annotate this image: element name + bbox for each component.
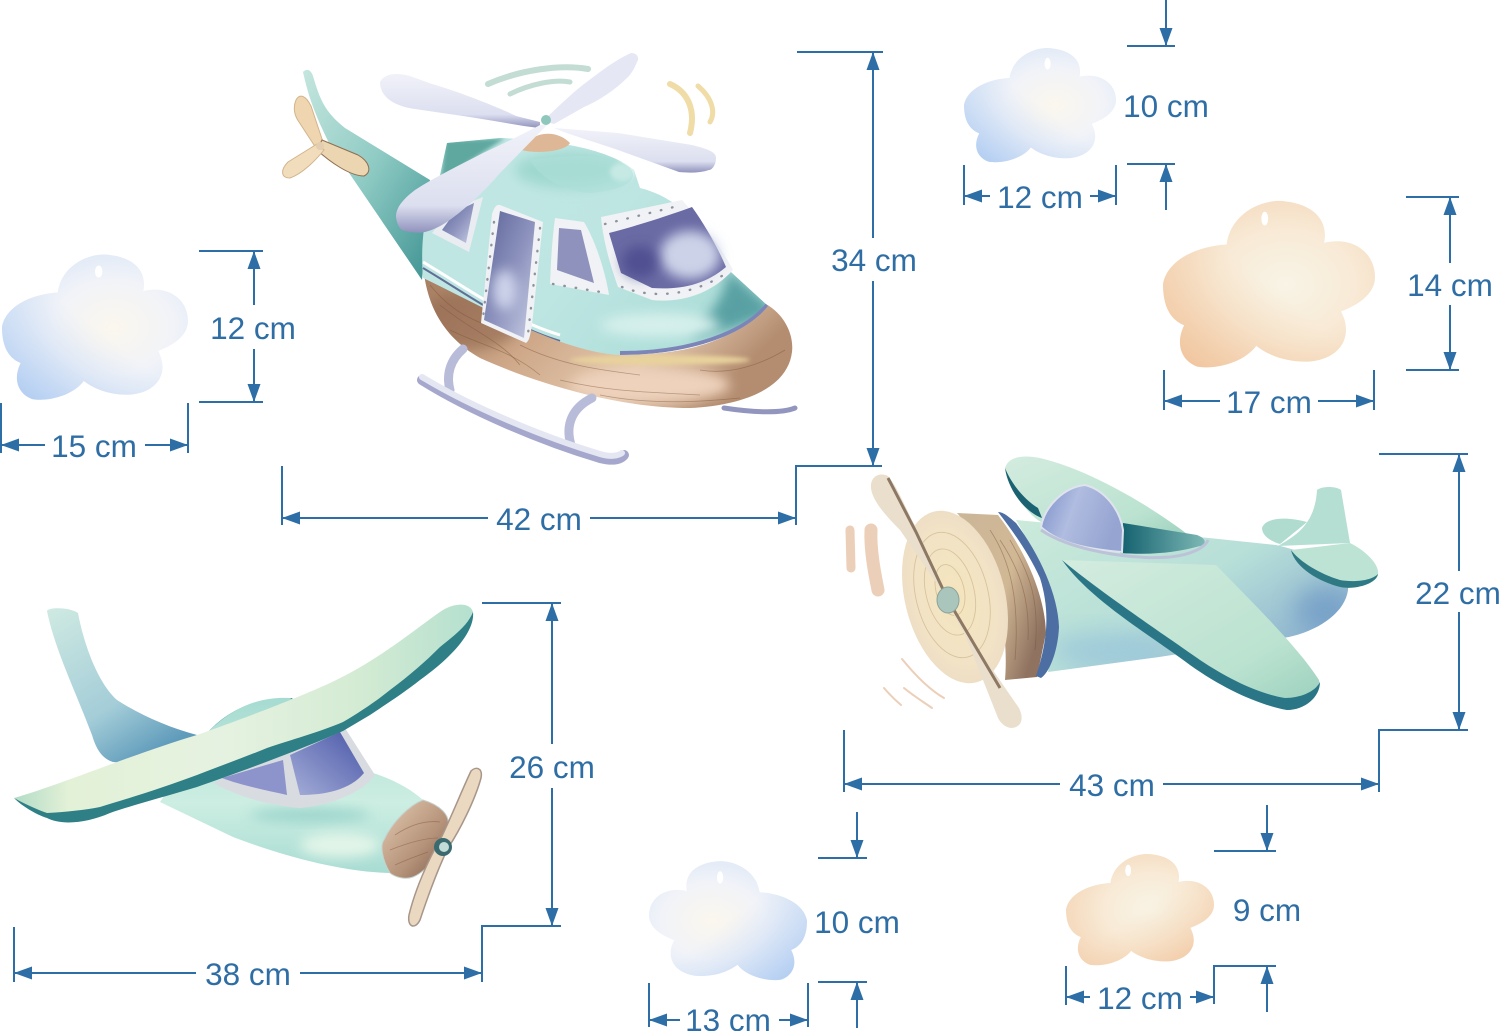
left plane canopy <box>213 728 375 808</box>
dimension: left plane width 38 cm: 38 cm <box>205 956 291 992</box>
tail rotor front blades <box>283 140 369 178</box>
right plane canopy <box>1041 485 1208 558</box>
helicopter side window <box>550 218 609 295</box>
dimension: small peach cloud height 9 cm <box>1214 805 1301 1012</box>
right plane tail <box>1262 487 1378 588</box>
left plane wing <box>14 605 473 822</box>
right plane fuselage <box>1016 520 1355 672</box>
right plane blue ring <box>998 512 1059 678</box>
illustration: blue cloud left <box>2 255 188 400</box>
dimension: left plane height 26 cm: 26 cm <box>509 749 595 785</box>
dimension: helicopter height 34 cm: 34 cm <box>831 242 917 278</box>
dimension: small peach cloud width 12 cm: 12 cm <box>1097 980 1183 1016</box>
helicopter skids <box>422 349 795 460</box>
right plane motion marks <box>850 530 944 708</box>
left plane propeller <box>409 768 481 926</box>
illustration: right propeller plane <box>850 456 1378 728</box>
left plane roof <box>208 698 300 740</box>
dimension: right plane width 43 cm <box>844 730 1468 803</box>
dimension: peach cloud height 14 cm: 14 cm <box>1407 267 1493 303</box>
dimension: peach cloud width 17 cm: 17 cm <box>1226 384 1312 420</box>
helicopter tail boom <box>303 70 430 280</box>
cabin roof dome outline <box>530 156 633 193</box>
dimension: left cloud width 15 cm: 15 cm <box>51 428 137 464</box>
top wing dark edge <box>1005 468 1042 518</box>
right plane top wing <box>1005 456 1195 540</box>
dimension: left plane width 38 cm <box>14 926 561 992</box>
right plane cockpit opening <box>1120 523 1205 554</box>
left plane tail fin <box>47 608 197 765</box>
helicopter main rotor blades <box>380 53 716 233</box>
dimension: bottom cloud height 10 cm: 10 cm <box>814 904 900 940</box>
right plane propeller <box>871 474 1022 728</box>
left plane fuselage <box>160 698 423 873</box>
right plane wooden spinner <box>885 500 1025 694</box>
helicopter cabin body <box>422 138 775 355</box>
illustration: helicopter <box>283 53 795 460</box>
helicopter rotor hub <box>522 134 570 152</box>
dimension: top cloud height 10 cm: 10 cm <box>1123 88 1209 124</box>
helicopter windshield <box>601 200 733 301</box>
helicopter back window <box>432 197 483 252</box>
illustration: peach cloud large <box>1163 201 1375 367</box>
helicopter motion lines <box>488 67 713 133</box>
dimension: top cloud width 12 cm: 12 cm <box>997 179 1083 215</box>
illustration: blue cloud bottom <box>649 861 807 980</box>
dimension: helicopter width 42 cm: 42 cm <box>496 501 582 537</box>
dimension: right plane width 43 cm: 43 cm <box>1069 767 1155 803</box>
dimension: left cloud height 12 cm: 12 cm <box>210 310 296 346</box>
helicopter door <box>481 205 543 343</box>
left plane wood cowl <box>382 800 448 878</box>
dimension: small peach cloud height 9 cm: 9 cm <box>1233 892 1301 928</box>
helicopter wood belly <box>424 278 792 408</box>
right plane lower wing <box>1062 560 1320 710</box>
dimension: helicopter width 42 cm <box>282 466 882 537</box>
illustration: left propeller plane <box>14 605 481 926</box>
right plane wood cowl <box>957 513 1046 680</box>
tail rotor rear blade <box>294 96 323 148</box>
illustration: peach cloud small <box>1066 854 1214 965</box>
illustration: blue cloud top right <box>964 48 1116 162</box>
dimension: right plane height 22 cm: 22 cm <box>1415 575 1500 611</box>
